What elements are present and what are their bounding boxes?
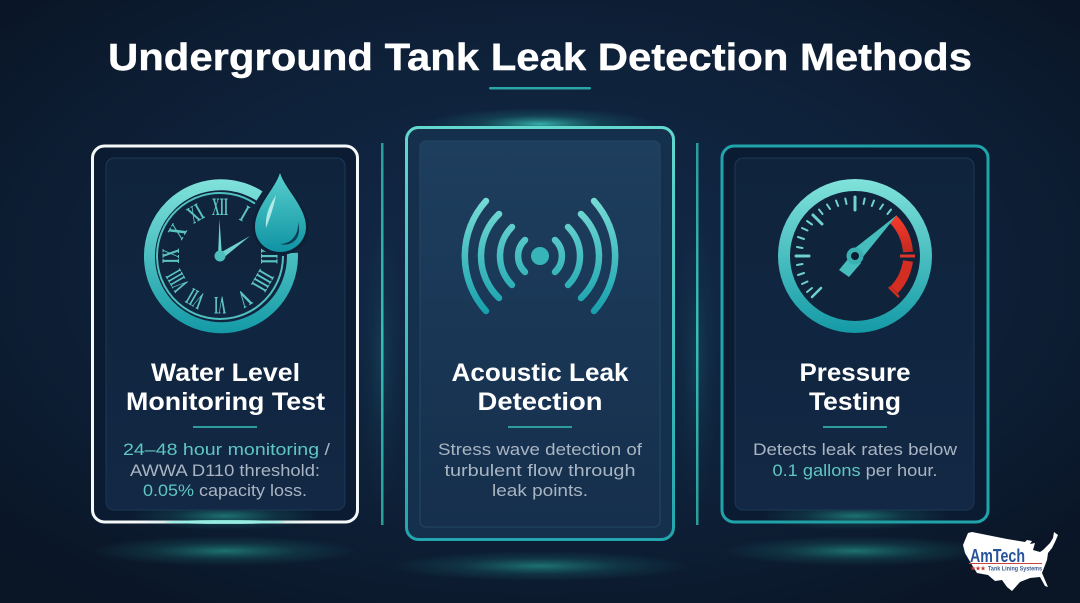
- title: Underground Tank Leak Detection Methods: [108, 37, 972, 79]
- panel: pressure testing: [722, 146, 988, 530]
- divider right: [696, 143, 698, 525]
- logo: AmTech Tank Lining Systems: Tank Lining Systems: [988, 566, 1042, 572]
- icon: clock with water drop: I: [235, 201, 253, 227]
- text block: 0.05% capacity loss.: [143, 481, 307, 500]
- icon: clock with water drop: XII: [212, 194, 228, 221]
- text block: AWWA D110 threshold:: [130, 461, 320, 480]
- logo: AmTech Tank Lining Systems: AmTech: [970, 546, 1025, 566]
- panel: acoustic leak detection: [406, 128, 674, 540]
- icon: clock with water drop: VIII: [161, 265, 195, 296]
- text block: [753, 440, 958, 480]
- icon: pressure gauge: [784, 185, 926, 327]
- heading: [452, 359, 629, 416]
- text block: 24–48 hour monitoring /: [123, 440, 330, 459]
- heading: Water Level: [151, 359, 300, 387]
- heading: [126, 359, 326, 416]
- icon: clock with water drop: VI: [214, 291, 226, 318]
- icon: clock with water drop: XI: [183, 199, 209, 229]
- text block: Detects leak rates below: [753, 440, 958, 459]
- heading: Detection: [478, 388, 602, 416]
- icon: clock with water drop: X: [163, 220, 193, 244]
- text block: turbulent flow through: [444, 461, 636, 480]
- icon: clock with water drop: III: [255, 248, 282, 264]
- icon: clock with water drop: IIII: [246, 265, 278, 295]
- text block: 0.1 gallons per hour.: [772, 461, 938, 480]
- heading: Monitoring Test: [126, 388, 326, 416]
- heading: Testing: [809, 388, 901, 416]
- icon: clock with water drop: V: [233, 284, 256, 312]
- text block: [123, 440, 330, 500]
- text block: Stress wave detection of: [438, 440, 642, 459]
- icon: sound waves: [465, 201, 615, 311]
- text block: [438, 440, 642, 500]
- icon: clock with water drop: IX: [158, 249, 185, 263]
- divider left: [381, 143, 384, 525]
- logo: AmTech Tank Lining Systems: ★★★: [970, 564, 986, 572]
- heading: [800, 359, 911, 416]
- heading: Acoustic Leak: [452, 359, 629, 387]
- icon: clock with water drop: [149, 171, 309, 328]
- heading: Pressure: [800, 359, 911, 387]
- icon: clock with water drop: VII: [182, 282, 209, 314]
- panel: water level monitoring test: [92, 146, 358, 530]
- text block: leak points.: [492, 481, 588, 500]
- logo: AmTech Tank Lining Systems: [963, 532, 1058, 591]
